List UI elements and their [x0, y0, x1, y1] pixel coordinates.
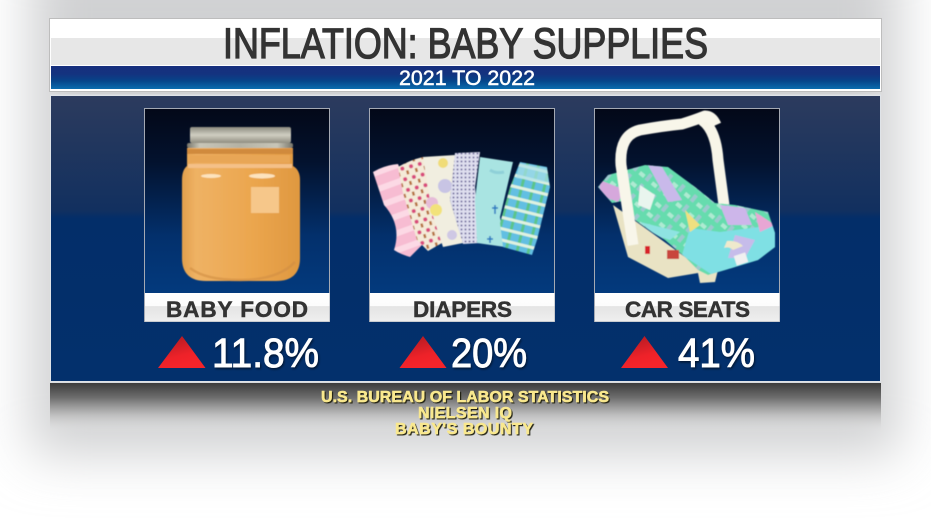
label bar — [370, 293, 554, 322]
subtitle: 2021 TO 2022 — [399, 67, 535, 90]
source strip — [50, 383, 881, 433]
title: INFLATION: BABY SUPPLIES — [223, 20, 708, 68]
icon: red up triangle — [621, 336, 668, 368]
label: BABY FOOD — [166, 297, 308, 322]
card: car seats — [590, 108, 785, 322]
value: 41% — [678, 330, 755, 376]
label bar — [595, 293, 780, 322]
value: 11.8% — [212, 330, 319, 376]
card: diapers — [370, 108, 554, 322]
icon: baby food jar — [182, 127, 300, 281]
stat: car seats increase — [621, 330, 755, 376]
label bar — [145, 293, 330, 322]
label: CAR SEATS — [625, 297, 750, 322]
sources — [321, 389, 609, 438]
card: baby food — [144, 108, 330, 322]
icon: red up triangle — [158, 336, 206, 368]
icon: car seat — [590, 116, 785, 285]
source line 2: NIELSEN IQ — [418, 405, 512, 422]
stat: baby food increase — [158, 330, 319, 376]
value: 20% — [451, 330, 527, 376]
subtitle bar — [51, 66, 880, 89]
icon: diapers — [373, 152, 550, 257]
source line 1: U.S. BUREAU OF LABOR STATISTICS — [321, 389, 609, 406]
icon: red up triangle — [400, 336, 446, 368]
stat: diapers increase — [400, 330, 527, 376]
label: DIAPERS — [413, 297, 512, 322]
main blue panel — [50, 94, 881, 382]
source line 3: BABY'S BOUNTY — [395, 421, 533, 438]
header panel — [50, 18, 882, 92]
